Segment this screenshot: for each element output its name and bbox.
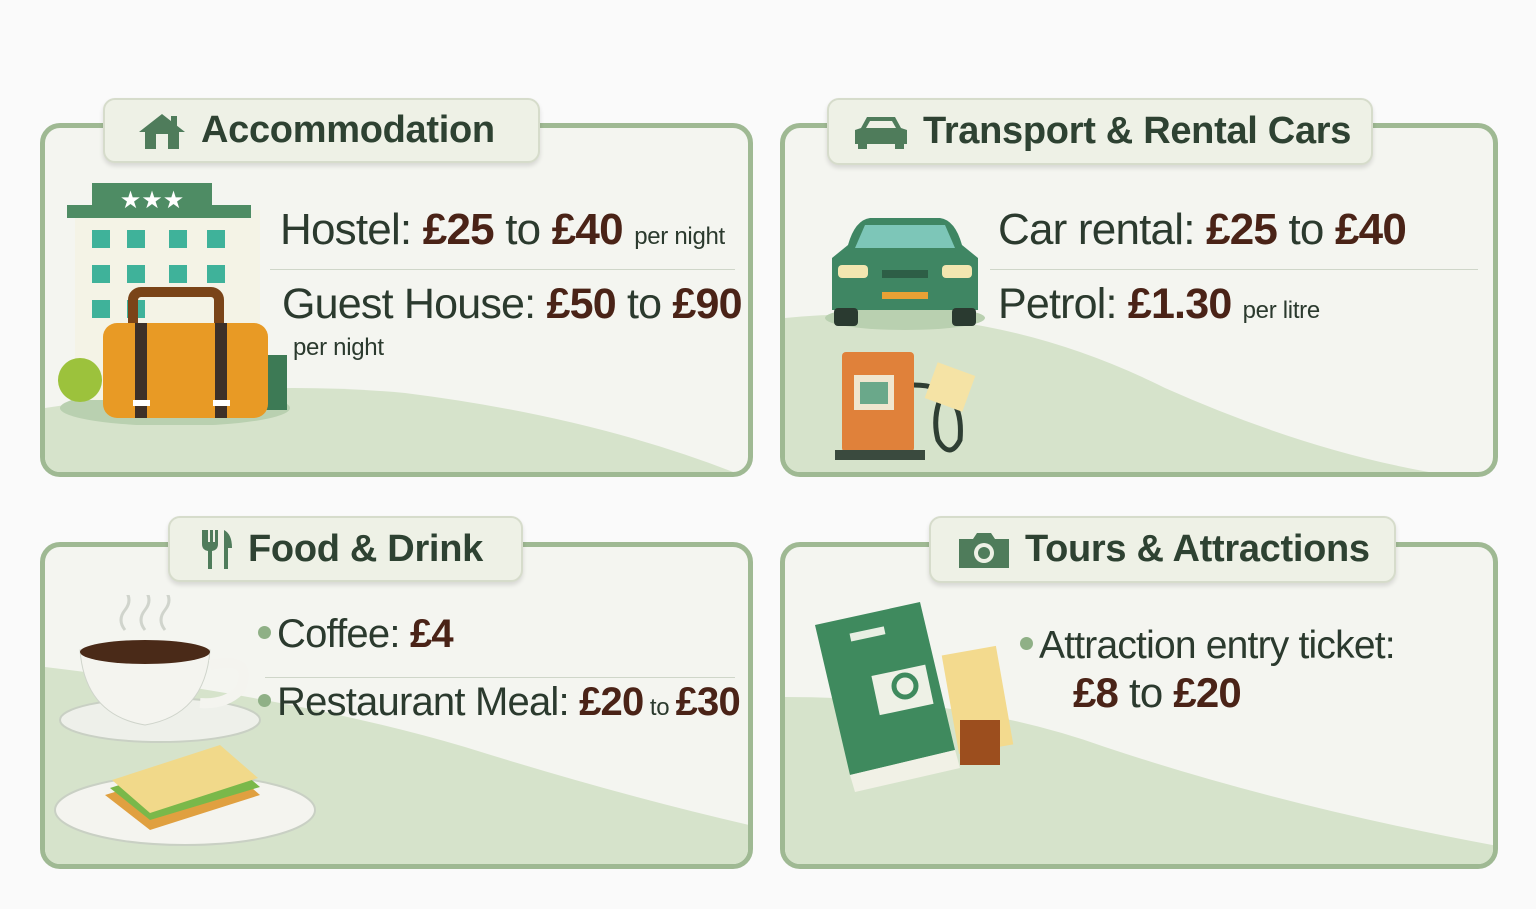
tab: tours bbox=[929, 516, 1396, 583]
text: guest house: Guest House: £50 to £90 bbox=[282, 280, 742, 328]
panel: accommodation bbox=[40, 123, 753, 477]
panel: tours bbox=[780, 542, 1498, 869]
tab: transport bbox=[827, 98, 1373, 165]
text: petrol: Petrol: £1.30 per litre bbox=[998, 280, 1320, 328]
illustration: guidebook and tickets bbox=[815, 602, 1014, 792]
text: per night: per night bbox=[293, 334, 384, 361]
text: attraction ticket: Attraction entry ticket: bbox=[1039, 624, 1395, 667]
icon: car bbox=[855, 117, 907, 149]
tab: transport: Transport & Rental Cars bbox=[923, 110, 1351, 152]
text: restaurant meal: Restaurant Meal: £20 to £30 bbox=[277, 680, 740, 724]
panel: food bbox=[40, 542, 753, 869]
text: car rental: Car rental: £25 to £40 bbox=[998, 205, 1406, 254]
tab: accommodation bbox=[103, 98, 540, 163]
tab: food: Food & Drink bbox=[248, 528, 483, 570]
icon: house bbox=[139, 114, 185, 149]
illustration: car and petrol pump bbox=[825, 218, 985, 460]
text: hostel: Hostel: £25 to £40 per night bbox=[280, 205, 725, 254]
tab: food bbox=[168, 516, 523, 582]
tab: accommodation: Accommodation bbox=[201, 109, 495, 151]
icon: camera bbox=[959, 533, 1009, 568]
icon: fork and knife bbox=[202, 530, 232, 569]
tab: tours: Tours & Attractions bbox=[1025, 528, 1370, 570]
illustration: coffee and sandwich bbox=[54, 595, 316, 846]
illustration: hotel and suitcase: ★★★ bbox=[120, 186, 184, 214]
text: coffee: Coffee: £4 bbox=[277, 612, 453, 656]
panel: transport bbox=[780, 123, 1498, 477]
text: ticket price: £8 to £20 bbox=[1073, 669, 1241, 716]
illustration: hotel and suitcase bbox=[58, 183, 290, 425]
